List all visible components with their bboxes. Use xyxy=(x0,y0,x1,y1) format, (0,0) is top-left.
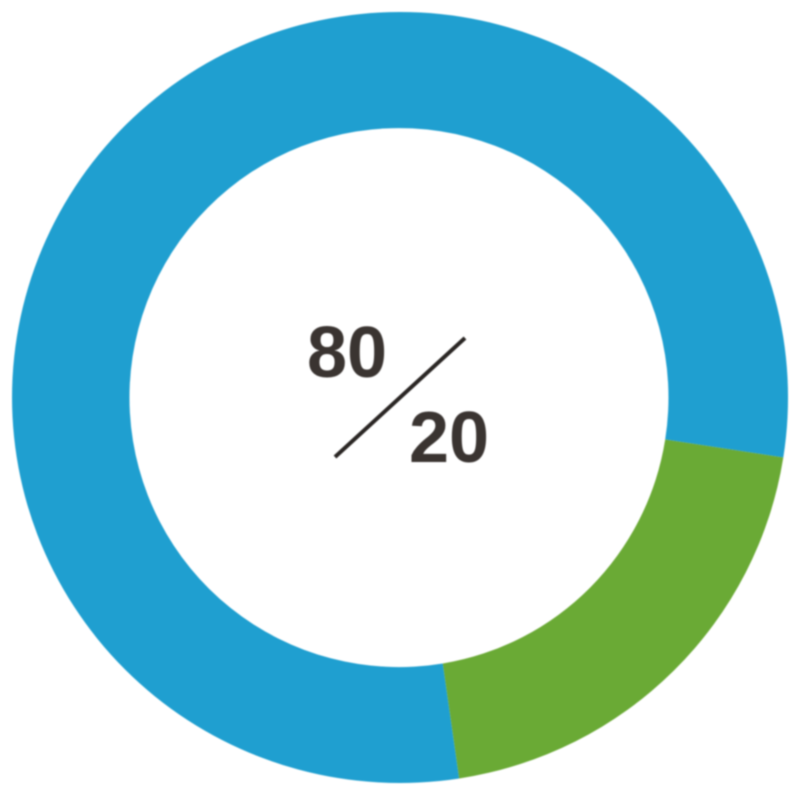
ring segment: 20 percent green xyxy=(443,440,783,778)
center label: 80 / 20 xyxy=(307,313,489,478)
value: 20: 20 xyxy=(409,398,489,478)
slash divider xyxy=(335,338,465,457)
value: 80: 80 xyxy=(307,313,387,393)
